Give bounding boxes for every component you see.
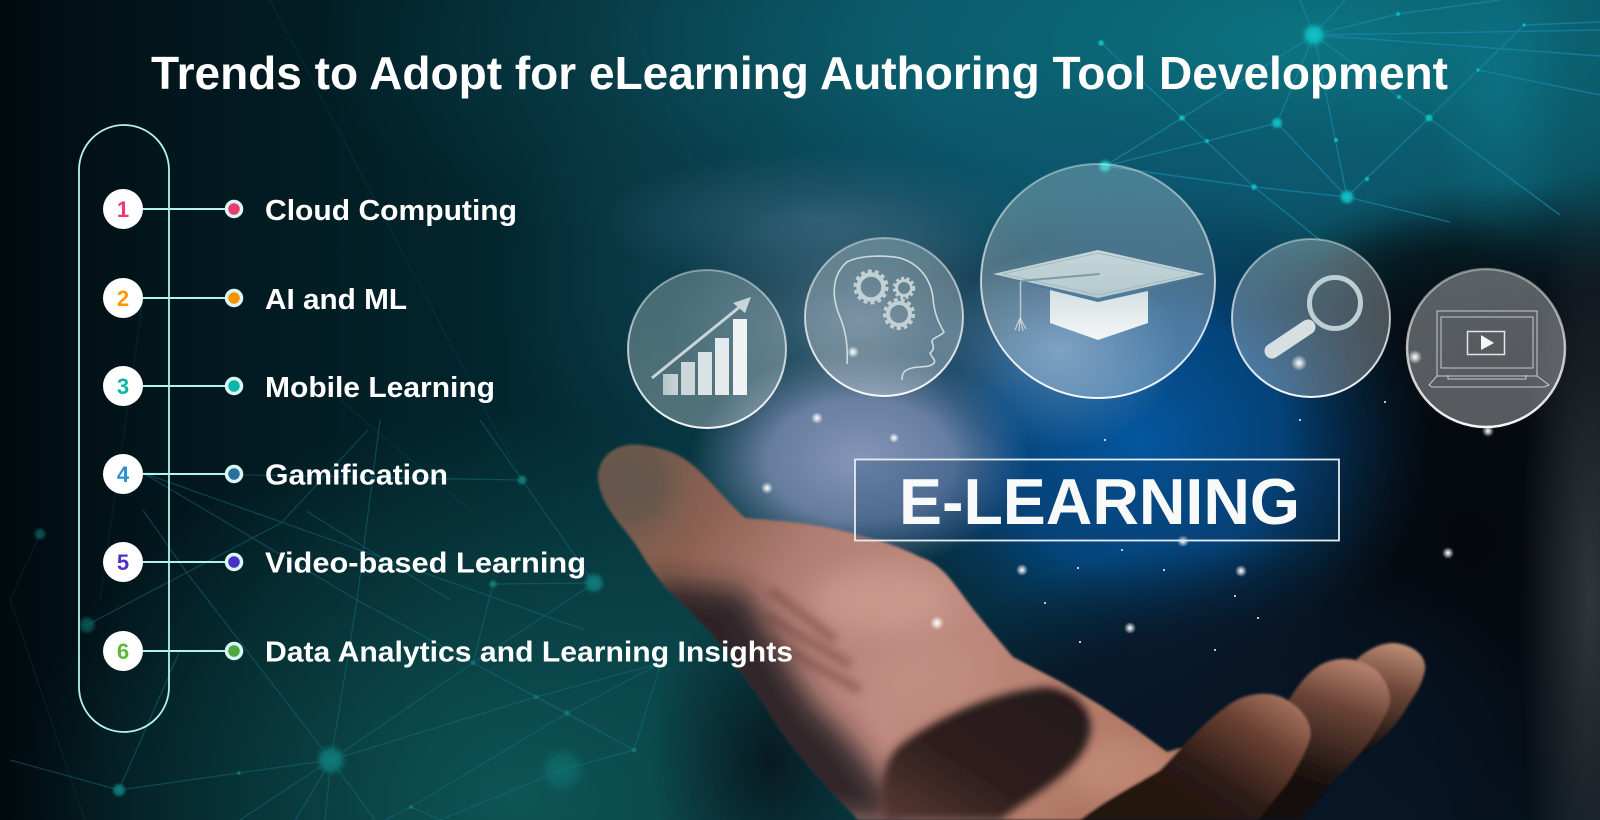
item 1: Cloud Computing: Cloud Computing [265, 195, 517, 227]
item 4: Gamification: Gamification [265, 460, 448, 492]
item 3: Mobile Learning [103, 366, 495, 406]
item 2: AI and ML: 2 [117, 286, 129, 311]
icon: growth chart [628, 270, 786, 428]
item 5: Video-based Learning [103, 542, 586, 582]
index finger [1080, 694, 1310, 820]
icon: laptop with video [1407, 269, 1565, 427]
item 3: Mobile Learning: Mobile Learning [265, 372, 495, 404]
item 6: Data Analytics and Learning Insights: 6 [117, 639, 129, 664]
E-LEARNING label box: E-LEARNING [899, 465, 1300, 538]
item 4: Gamification: 4 [117, 462, 130, 487]
icon: magnifying glass [1232, 239, 1390, 397]
item 6: Data Analytics and Learning Insights [103, 631, 793, 671]
item 1: Cloud Computing [103, 189, 517, 229]
network lines: upper right [1101, 0, 1600, 240]
item 4: Gamification [103, 454, 448, 494]
item 6: Data Analytics and Learning Insights: Data Analytics and Learning Insights [265, 636, 793, 668]
icon: head with gears [805, 238, 963, 396]
item 1: Cloud Computing: 1 [117, 197, 129, 222]
item 5: Video-based Learning: 5 [117, 550, 129, 575]
item 5: Video-based Learning: Video-based Learning [265, 548, 586, 580]
little finger [1320, 643, 1425, 755]
pill outline [79, 125, 169, 732]
network lines: lower left [10, 0, 700, 820]
title: Trends to Adopt for eLearning Authoring Tool Development [151, 47, 1448, 99]
photo: open hand [590, 440, 1425, 820]
palm shadow of curled thumb base [882, 687, 1091, 820]
item 2: AI and ML: AI and ML [265, 284, 407, 316]
ring finger [1215, 659, 1390, 820]
sparkles [761, 346, 1494, 651]
panel: numbered trends list [79, 125, 793, 732]
item 3: Mobile Learning: 3 [117, 374, 129, 399]
icon: graduation cap [981, 164, 1215, 398]
palm and thumb [596, 443, 1183, 820]
item 2: AI and ML [103, 278, 407, 318]
